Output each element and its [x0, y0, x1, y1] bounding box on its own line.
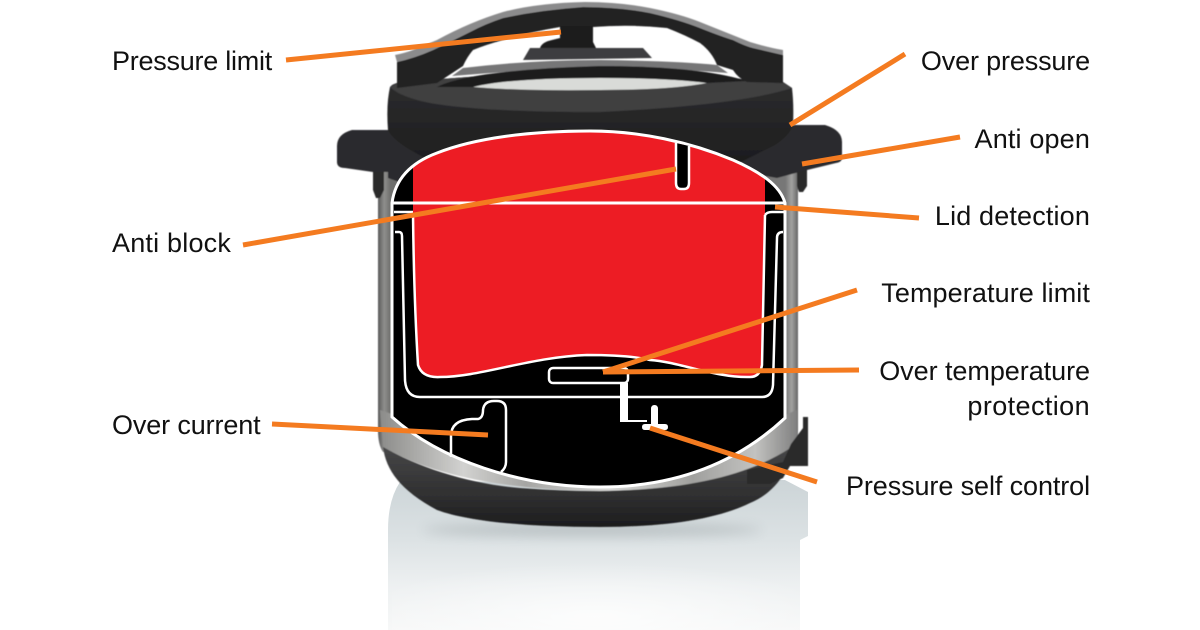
label: over current: Over current [112, 410, 261, 440]
lid top surface [390, 68, 792, 112]
window [473, 78, 707, 90]
label: over temperature protection: protection [967, 391, 1090, 421]
lid body [387, 68, 793, 165]
silver ring [380, 410, 797, 491]
line: over current [272, 424, 488, 435]
label: pressure limit: Pressure limit [112, 46, 273, 76]
line: lid detection [775, 207, 919, 218]
red chamber outline [413, 215, 765, 377]
label: temperature limit: Temperature limit [881, 278, 1090, 308]
label: over pressure: Over pressure [921, 46, 1090, 76]
inner pot outline [395, 232, 783, 397]
black cutaway shape [392, 131, 785, 487]
side handle: left [337, 130, 440, 183]
cutaway cross-section [392, 131, 785, 487]
label: anti open: Anti open [975, 124, 1090, 154]
label: lid detection: Lid detection [935, 201, 1090, 231]
label: pressure self control: Pressure self control [846, 471, 1090, 501]
side handle: right [730, 125, 842, 178]
line: over pressure [790, 54, 905, 125]
line: temperature limit [603, 290, 857, 372]
callout lines [243, 32, 960, 482]
valve [540, 26, 596, 48]
top handle highlight [395, 2, 783, 62]
steel body [378, 170, 798, 452]
control box [747, 417, 808, 484]
line: anti open [802, 137, 960, 164]
red chamber [413, 131, 765, 377]
base [383, 447, 792, 527]
line: over temperature protection [603, 370, 859, 372]
lid seal line [392, 202, 785, 204]
lid dark ring [437, 66, 747, 87]
label: anti block: Anti block [112, 228, 231, 258]
line: pressure self control [650, 428, 817, 482]
stem [620, 383, 647, 422]
pressure sensor [642, 405, 668, 430]
pressure cooker photo [337, 2, 842, 527]
handle legs [373, 165, 807, 198]
line: anti block [243, 169, 676, 245]
control board outline [451, 401, 506, 472]
lid dome rim [452, 60, 728, 76]
heating plate [549, 368, 628, 383]
top handle [397, 7, 783, 88]
valve plate [523, 48, 652, 60]
line: pressure limit [286, 32, 561, 60]
anti block slot [676, 143, 689, 189]
cutaway outline [392, 131, 785, 487]
label: over temperature protection: Over temperature [879, 356, 1090, 386]
label: over temperature protection [879, 356, 1090, 421]
seal stubs [394, 212, 784, 215]
reflection below cooker [388, 480, 808, 630]
